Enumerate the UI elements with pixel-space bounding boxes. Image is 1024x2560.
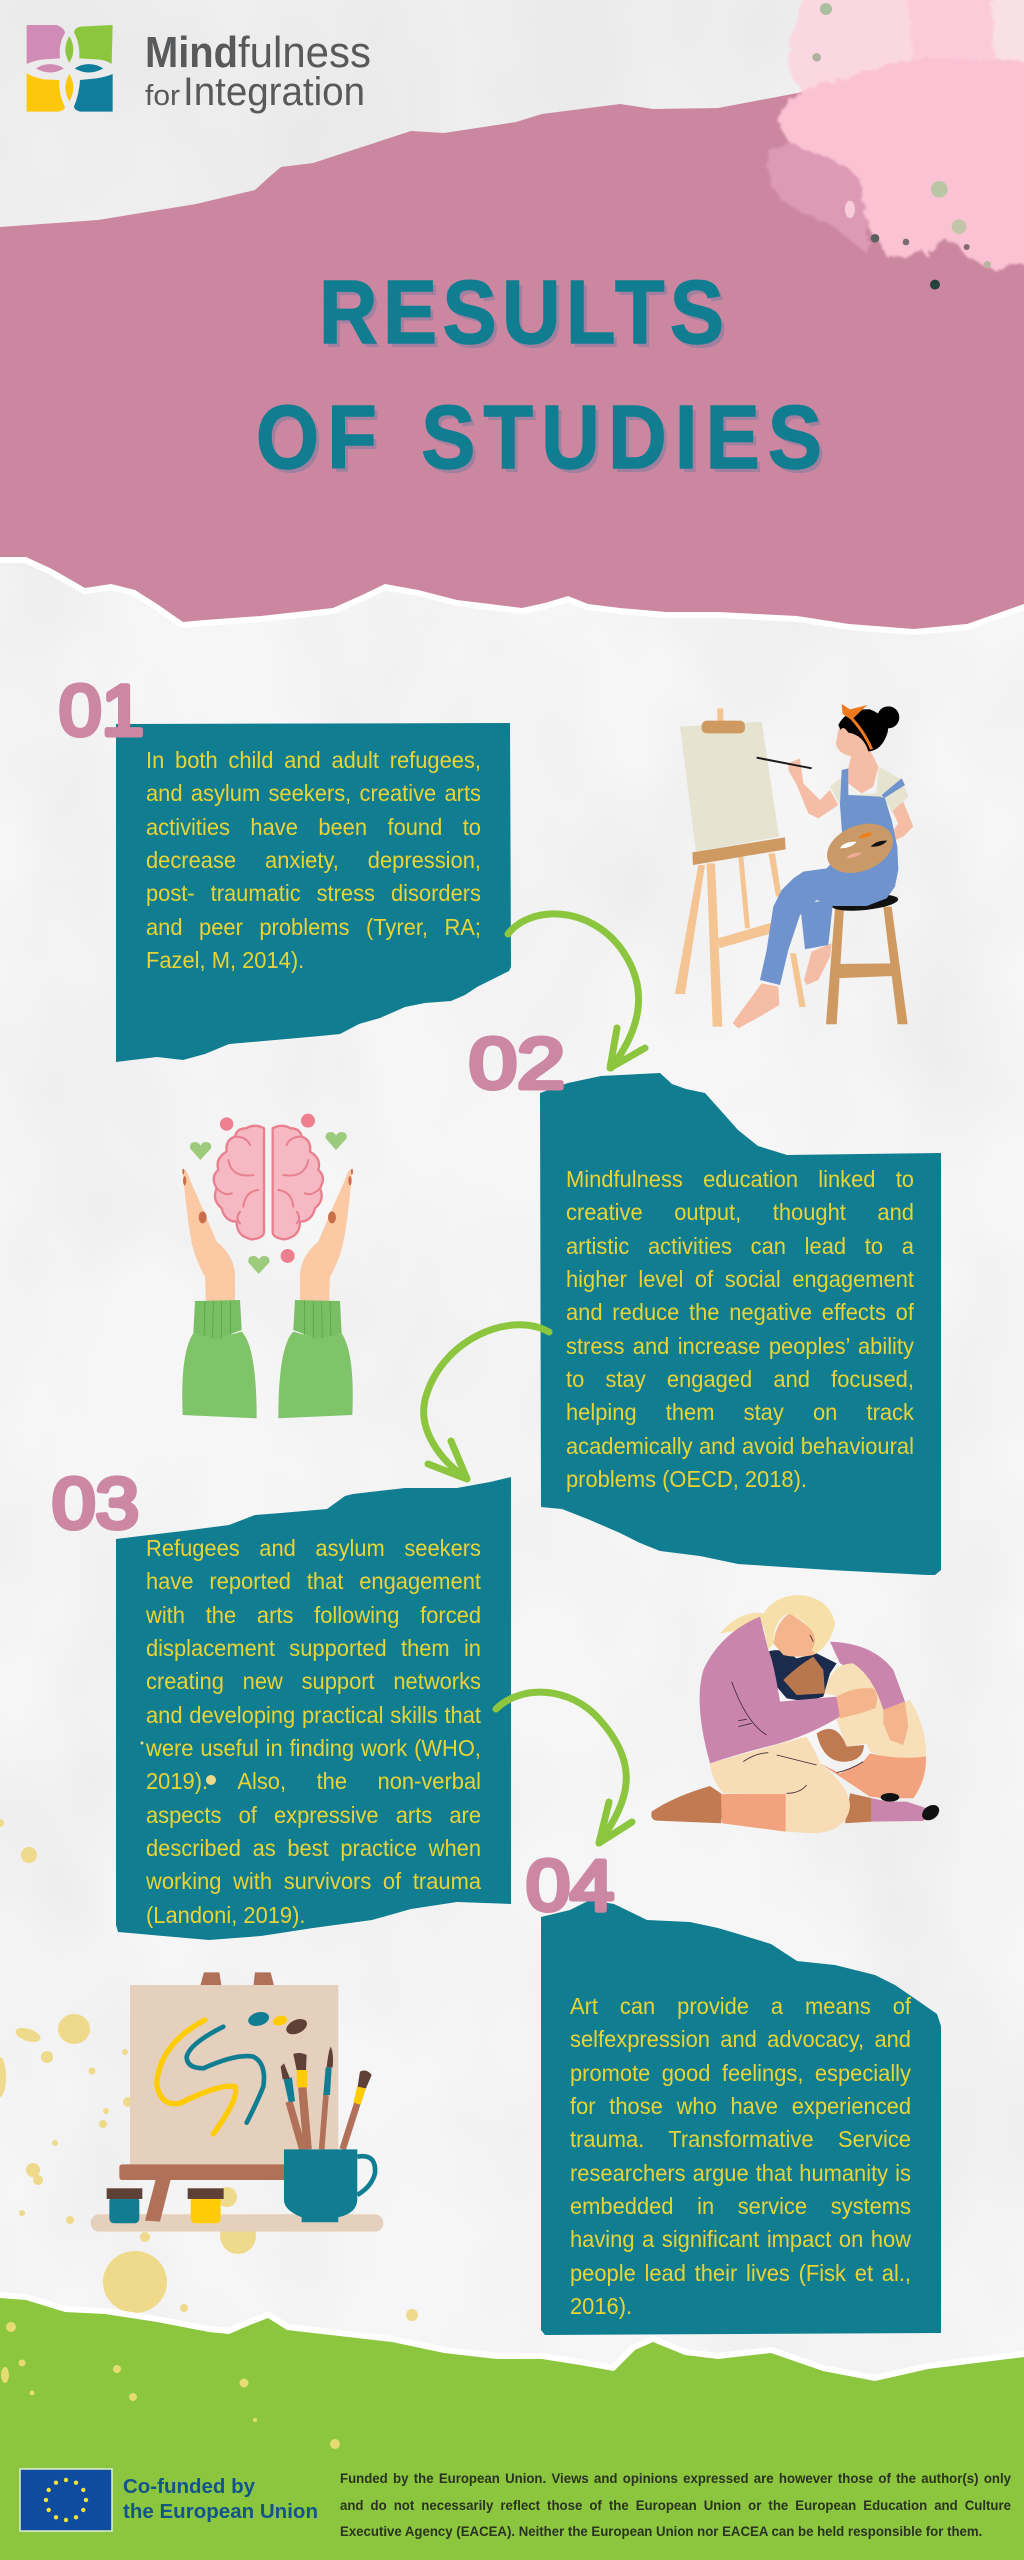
text: study 03: and developing practical skills that bbox=[146, 1702, 481, 1728]
logo wordmark: fulness bbox=[238, 28, 371, 77]
text: study 03: (Landoni, 2019). bbox=[146, 1902, 305, 1928]
text: study 02: creative output, thought and bbox=[566, 1199, 914, 1225]
text: study 04: having a significant impact on how bbox=[570, 2226, 911, 2252]
text: study 04: Art can provide a means of bbox=[570, 1993, 911, 2019]
text: study 03: creating new support networks bbox=[146, 1668, 481, 1694]
text: study 04: promote good feelings, especially bbox=[570, 2060, 911, 2086]
illustration: easel with brushes and cup bbox=[91, 1972, 383, 2232]
number 01: 01 bbox=[59, 672, 144, 751]
text: study 02 bbox=[566, 1166, 914, 1492]
co-funded label: Co-funded by bbox=[123, 2476, 256, 2498]
text: study 01: In both child and adult refugees, bbox=[146, 747, 481, 773]
number 04: 04 bbox=[526, 1847, 614, 1926]
text: study 04: people lead their lives (Fisk et al., bbox=[570, 2260, 911, 2286]
gold paint splatter bbox=[0, 1742, 418, 2321]
text: study 01: post- traumatic stress disorders bbox=[146, 880, 481, 906]
panel 03 background bbox=[116, 1477, 511, 1940]
text: study 01: Fazel, M, 2014). bbox=[146, 947, 304, 973]
text: study 03 bbox=[146, 1535, 482, 1928]
text: study 04: 2016). bbox=[570, 2293, 632, 2319]
text: study 03: working with survivors of trauma bbox=[146, 1868, 481, 1894]
illustration: woman hugging child bbox=[651, 1595, 942, 1833]
title: RESULTS bbox=[319, 263, 729, 363]
co-funded label: the European Union bbox=[123, 2501, 318, 2523]
text: study 03: 2019). Also, the non-verbal bbox=[146, 1768, 481, 1794]
text: study 02: artistic activities can lead to a bbox=[566, 1233, 914, 1259]
logo wordmark: Mind bbox=[145, 28, 238, 77]
text: study 04: for those who have experienced bbox=[570, 2093, 911, 2119]
number 02: 02 bbox=[469, 1025, 565, 1104]
title bbox=[256, 263, 830, 488]
pink title band bbox=[0, 50, 1024, 629]
text: study 01: decrease anxiety, depression, bbox=[146, 847, 481, 873]
text: study 04: embedded in service systems bbox=[570, 2193, 911, 2219]
text: study 02: to stay engaged and focused, bbox=[566, 1366, 914, 1392]
text: study 02: and reduce the negative effects of bbox=[566, 1299, 914, 1325]
funding disclaimer: and do not necessarily reflect those of the European Union or the European Education and Culture bbox=[340, 2496, 1011, 2512]
text: study 02: problems (OECD, 2018). bbox=[566, 1466, 807, 1492]
text: study 03: have reported that engagement bbox=[146, 1568, 481, 1594]
co-funded label bbox=[123, 2476, 318, 2523]
title: OF STUDIES bbox=[256, 388, 830, 488]
text: study 04: selfexpression and advocacy, and bbox=[570, 2026, 911, 2052]
text: study 01: and peer problems (Tyrer, RA; bbox=[146, 914, 481, 940]
panel 04 background bbox=[541, 1900, 941, 2335]
panel 01 background bbox=[116, 723, 511, 1062]
arrow 03 to 04 bbox=[496, 1692, 632, 1843]
text: study 01: activities have been found to bbox=[146, 814, 481, 840]
funding disclaimer: Executive Agency (EACEA). Neither the European Union nor EACEA can be held responsible for them. bbox=[340, 2523, 982, 2539]
arrow 02 to 03 bbox=[424, 1325, 549, 1479]
text: study 04 bbox=[570, 1993, 911, 2319]
funding disclaimer: Funded by the European Union. Views and opinions expressed are however those of the author(s) only bbox=[340, 2470, 1011, 2486]
gold splatter on green bbox=[1, 2322, 340, 2449]
text: study 04: trauma. Transformative Service bbox=[570, 2126, 911, 2152]
text: study 02: Mindfulness education linked to bbox=[566, 1166, 914, 1192]
watercolour blob bbox=[767, 0, 1024, 290]
illustration: painter at easel bbox=[675, 704, 913, 1028]
logo wordmark: for bbox=[145, 80, 180, 112]
panel 02 background bbox=[540, 1073, 941, 1575]
arrow 01 to 02 bbox=[508, 914, 645, 1068]
text: study 03: aspects of expressive arts are bbox=[146, 1802, 481, 1828]
text: study 01: and asylum seekers, creative arts bbox=[146, 780, 481, 806]
green footer band bbox=[0, 2298, 1024, 2560]
logo wordmark: Integration bbox=[183, 70, 365, 114]
number 03: 03 bbox=[52, 1465, 139, 1544]
text: study 01 bbox=[146, 747, 481, 973]
logo mark bbox=[27, 25, 113, 112]
text: study 02: academically and avoid behavioural bbox=[566, 1433, 914, 1459]
logo wordmark bbox=[145, 28, 371, 114]
text: study 04: researchers argue that humanity is bbox=[570, 2160, 911, 2186]
text: study 03: described as best practice when bbox=[146, 1835, 481, 1861]
funding disclaimer bbox=[340, 2470, 1011, 2539]
EU flag bbox=[20, 2469, 112, 2531]
text: study 03: Refugees and asylum seekers bbox=[146, 1535, 481, 1561]
text: study 02: stress and increase peoples’ ability bbox=[566, 1333, 914, 1359]
text: study 02: helping them stay on track bbox=[566, 1399, 914, 1425]
text: study 02: higher level of social engagement bbox=[566, 1266, 914, 1292]
text: study 03: displacement supported them in bbox=[146, 1635, 481, 1661]
text: study 03: with the arts following forced bbox=[146, 1602, 481, 1628]
text: study 03: were useful in finding work (WHO, bbox=[146, 1735, 481, 1761]
illustration: hands holding brain bbox=[182, 1114, 353, 1418]
